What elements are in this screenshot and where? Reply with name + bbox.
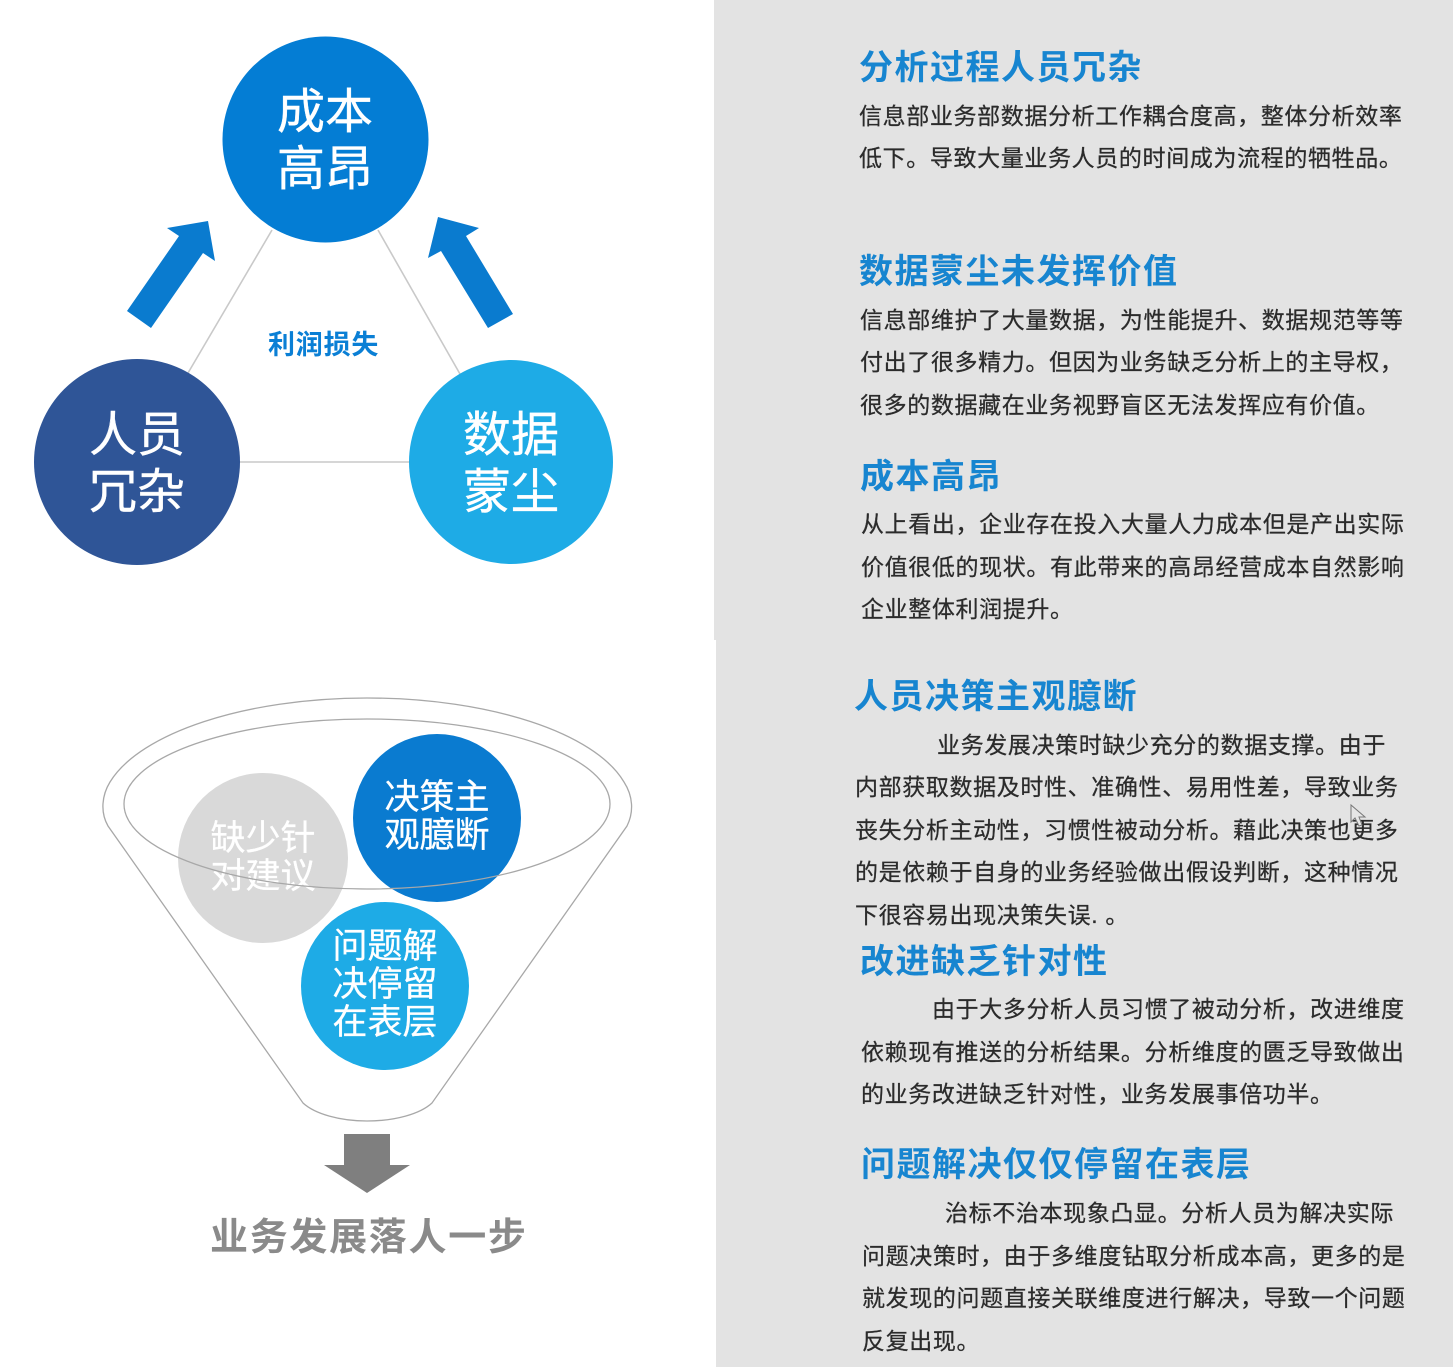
section: improvement lacks focus: 的业务改进缺乏针对性，业务发展事倍功半。 [861,1081,1334,1107]
section: improvement lacks focus: 由于大多分析人员习惯了被动分析，改进维度 [932,996,1405,1022]
section: subjective decisions: 内部获取数据及时性、准确性、易用性差，导致业务 [855,774,1398,800]
section: data value unused: 很多的数据藏在业务视野盲区无法发挥应有价值。 [860,392,1380,418]
section: data value unused [859,253,1404,418]
label: business falls behind: 业务发展落人一步 [210,1217,528,1259]
arrow: funnel down [324,1134,410,1193]
funnel circle: lacking targeted advice [178,773,348,943]
triangle connector lines [188,230,460,462]
funnel circle: subjective decisions: 观臆断 [384,816,490,855]
arrow: left up to high cost [127,221,215,328]
funnel circle: lacking targeted advice: 对建议 [210,857,316,896]
label: profit loss: 利润损失 [268,330,379,360]
section: subjective decisions: 下很容易出现决策失误. 。 [855,902,1129,928]
section: superficial problem solving [861,1146,1406,1354]
section: subjective decisions: 业务发展决策时缺少充分的数据支撑。由于 [937,732,1386,758]
panel: right grey background [714,0,1453,1367]
section: data value unused: 付出了很多精力。但因为业务缺乏分析上的主导权， [860,349,1404,375]
circle: dusty data [409,360,613,564]
circle: high cost [222,36,428,242]
section: data value unused: 信息部维护了大量数据，为性能提升、数据规范等等 [860,307,1404,333]
section: subjective decisions: 丧失分析主动性，习惯性被动分析。藉此决策也更多 [855,817,1398,843]
funnel circle: superficial problem solving: 决停留 [332,965,438,1004]
funnel circle: subjective decisions [353,734,521,902]
funnel circle: subjective decisions: 决策主 [384,778,490,817]
section: high cost [860,458,1404,622]
circle: dusty data: 数据 [463,409,559,462]
section: high cost: 成本高昂 [860,458,1002,496]
section: superficial problem solving: 问题决策时，由于多维度钻取分析成本高，更多的是 [862,1243,1406,1269]
section: superficial problem solving: 问题解决仅仅停留在表层 [861,1146,1252,1184]
section: superficial problem solving: 反复出现。 [862,1328,980,1354]
circle: redundant staff [34,359,240,565]
section: superficial problem solving: 治标不治本现象凸显。分析人员为解决实际 [945,1200,1394,1226]
funnel circle: superficial problem solving: 在表层 [332,1003,438,1042]
diagram: funnel [103,698,632,1259]
icon: mouse cursor [1351,805,1365,826]
funnel circle: superficial problem solving: 问题解 [332,927,438,966]
circle: high cost: 高昂 [277,143,373,196]
funnel circle: lacking targeted advice: 缺少针 [210,819,316,858]
section: improvement lacks focus [860,943,1405,1107]
section: improvement lacks focus: 改进缺乏针对性 [860,943,1108,981]
section: superficial problem solving: 就发现的问题直接关联维度进行解决，导致一个问题 [862,1285,1406,1311]
section: subjective decisions: 人员决策主观臆断 [854,678,1138,716]
circle: dusty data: 蒙尘 [463,466,559,519]
section: subjective decisions: 的是依赖于自身的业务经验做出假设判断，这种情况 [855,859,1398,885]
circle: redundant staff: 人员 [89,409,185,462]
funnel circle: superficial problem solving [301,902,469,1070]
section: redundant analysis staff: 分析过程人员冗杂 [859,49,1143,87]
section: high cost: 价值很低的现状。有此带来的高昂经营成本自然影响 [861,554,1404,580]
arrow: right up to high cost [428,217,513,328]
funnel outline [103,698,632,1121]
circle: redundant staff: 冗杂 [89,466,185,519]
section: high cost: 从上看出，企业存在投入大量人力成本但是产出实际 [861,511,1404,537]
section: redundant analysis staff [859,49,1402,171]
diagram: profit loss triangle [34,36,613,565]
section: redundant analysis staff: 低下。导致大量业务人员的时间成为流程的牺牲品。 [859,145,1402,171]
section: redundant analysis staff: 信息部业务部数据分析工作耦合度高，整体分析效率 [859,103,1402,129]
section: subjective decisions [854,678,1398,928]
circle: high cost: 成本 [277,86,373,139]
section: data value unused: 数据蒙尘未发挥价值 [859,253,1178,291]
section: high cost: 企业整体利润提升。 [861,596,1074,622]
section: improvement lacks focus: 依赖现有推送的分析结果。分析维度的匮乏导致做出 [861,1039,1404,1065]
